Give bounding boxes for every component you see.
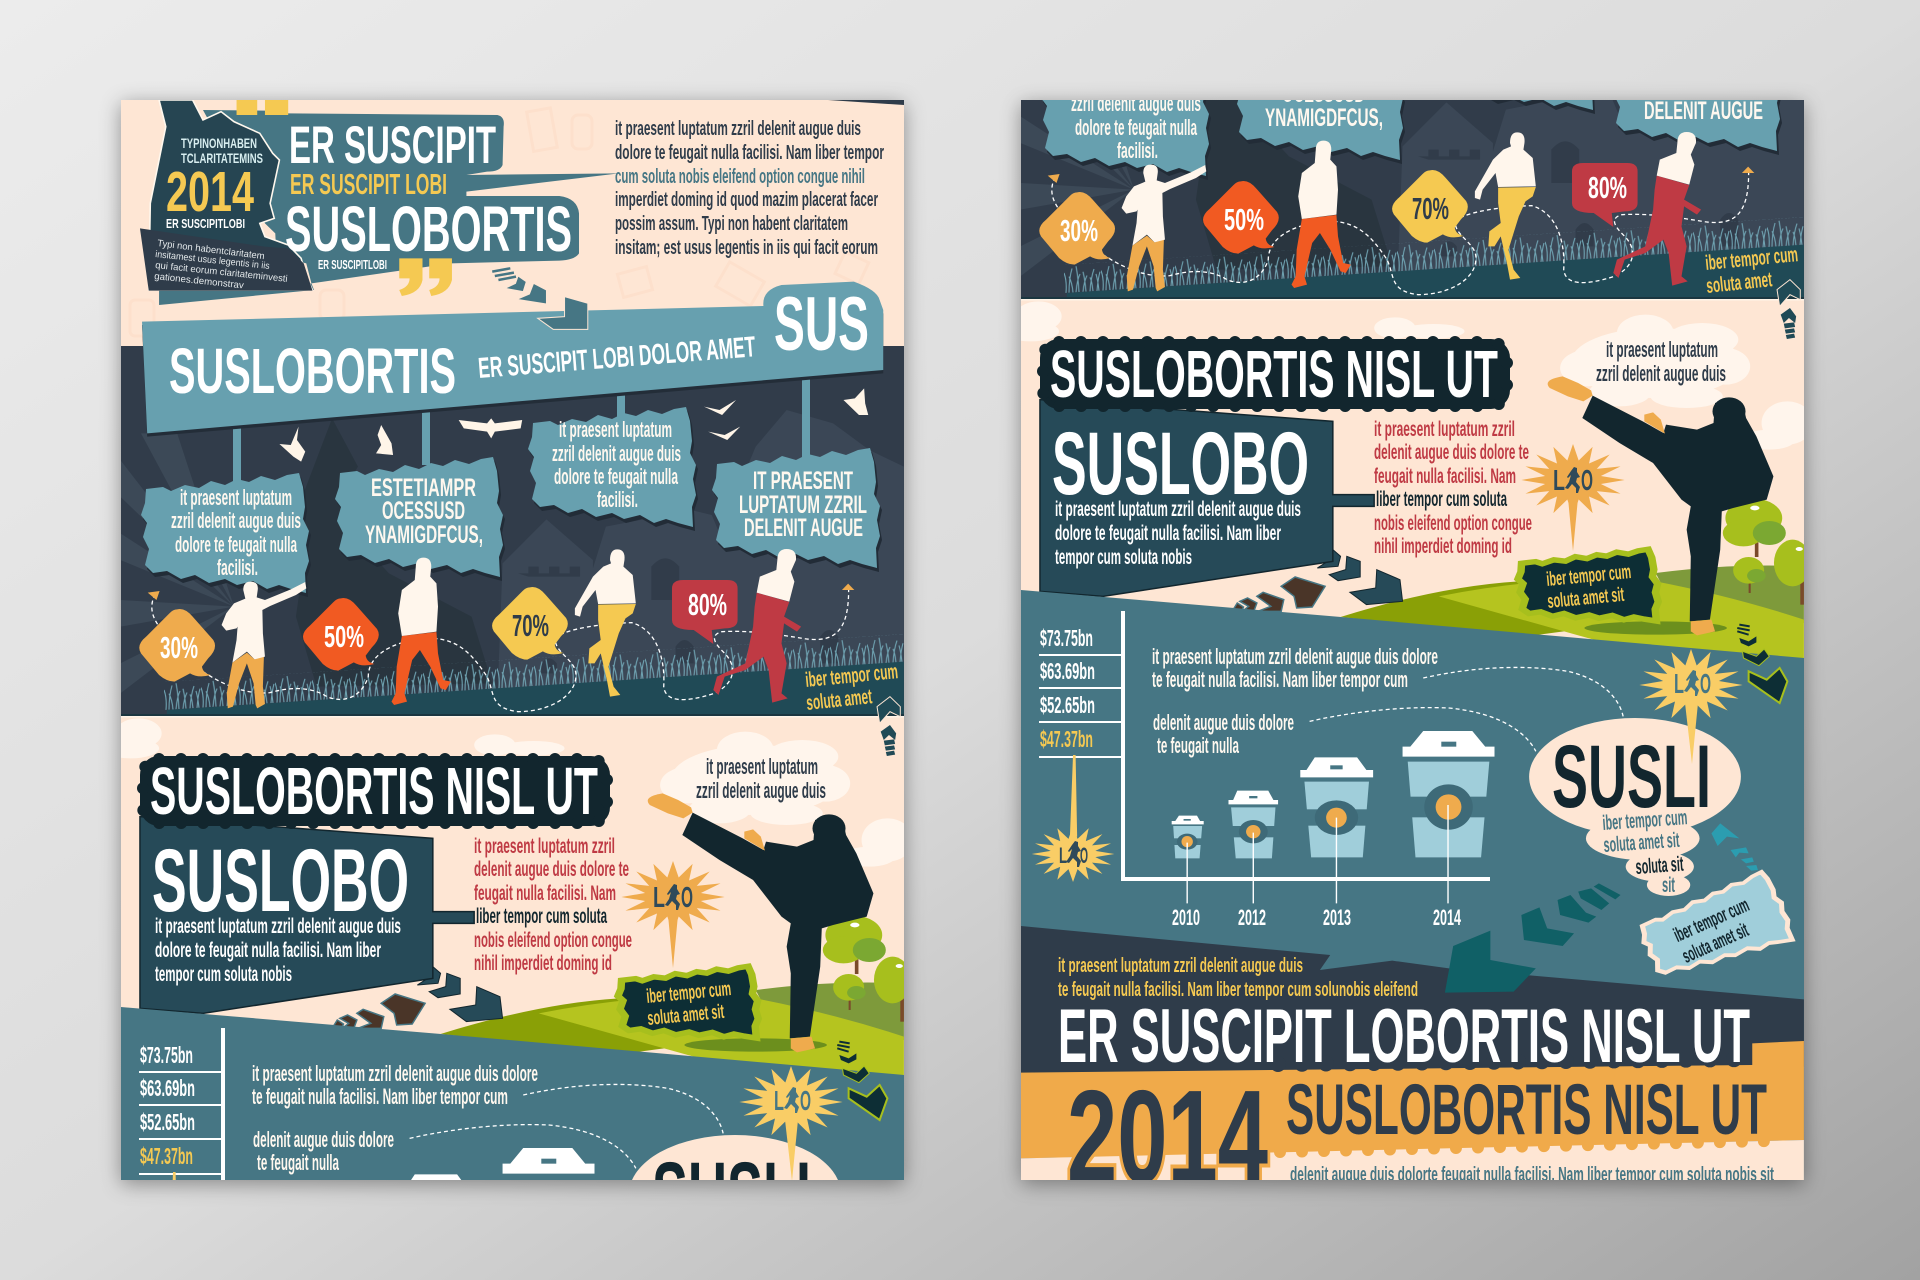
- text block: sign labels: zzril delenit augue duis: [552, 441, 681, 466]
- callout: cloud text: it praesent luptatum: [1606, 337, 1718, 362]
- callouts: percent bubbles: [1039, 163, 1638, 265]
- text block: bubble lines: soluta sit: [1635, 853, 1684, 879]
- text: value labels: $52.65bn: [140, 1109, 195, 1135]
- panel: right page: [1021, 100, 1804, 1180]
- icon label: orange burst: O: [1581, 465, 1593, 497]
- block: head badge text: TCLARITATEMINS: [181, 150, 263, 166]
- text block: sign labels: facilisi.: [597, 487, 638, 512]
- block: head badge text: gationes.demonstrav: [154, 271, 245, 291]
- icon label: lower burst: [1059, 843, 1088, 868]
- text block: dark box: it praesent luptatum zzril delenit augue duis: [155, 915, 401, 938]
- text block: sign labels: facilisi.: [1117, 138, 1158, 163]
- icon label: orange burst: L: [1553, 465, 1565, 497]
- block: head badge text: Typi non habentclaritatem: [157, 238, 265, 262]
- text block: bubble lines: soluta amet sit: [1603, 829, 1680, 857]
- text block: red paragraph: nobis eleifend option congue: [1374, 512, 1532, 535]
- icon: lower burst runner: [1066, 841, 1081, 867]
- icon: up chevrons: [1777, 280, 1800, 339]
- text block: bubble lines: sit: [1662, 874, 1675, 897]
- text block: red paragraph: nihil imperdiet doming id: [474, 952, 612, 975]
- text block: red paragraph: feugait nulla facilisi. Nam: [1374, 465, 1516, 488]
- text block: sign labels: OCESSUSD: [382, 497, 465, 525]
- icon: yellow burst: [739, 1066, 843, 1181]
- text block: dark box: tempor cum soluta nobis: [1055, 546, 1192, 569]
- panel: left page: [102, 100, 913, 1254]
- block: header headline: ER SUSCIPIT LOBI: [290, 169, 447, 201]
- heading: ribbon text: SUSLOBORTIS: [169, 335, 456, 407]
- text block: sign labels: YNAMIGDFCUS,: [365, 521, 483, 549]
- heading: ribbon text: SUS: [774, 282, 869, 367]
- block: head badge text: [154, 135, 288, 291]
- heading: ribbon text: [170, 296, 868, 394]
- callouts: percent bubbles: [139, 580, 738, 682]
- figures: runners: [222, 549, 801, 708]
- text block: sign labels: [171, 417, 867, 580]
- block: header headline: ER SUSCIPIT: [289, 116, 496, 175]
- text block: chart notes: it praesent luptatum zzril delenit augue duis dolore: [252, 1061, 538, 1086]
- heading: ribbon text: ER SUSCIPIT LOBI DOLOR AMET: [477, 331, 757, 385]
- text block: intro paragraph: cum soluta nobis eleifend option congue nihil: [615, 165, 865, 188]
- text: scene caption: soluta amet: [805, 685, 873, 715]
- text block: chart notes: te feugait nulla facilisi. Nam liber tempor cum: [252, 1084, 508, 1109]
- block: head badge text: 2014: [166, 160, 254, 224]
- panel: martial arts section: [1021, 299, 1804, 658]
- text block: footer note: it praesent luptatum zzril delenit augue duis: [1058, 955, 1303, 977]
- text block: red paragraph: liber tempor cum soluta: [1376, 488, 1507, 511]
- text block: sign labels: DELENIT AUGUE: [1644, 97, 1763, 125]
- text block: red paragraph: nihil imperdiet doming id: [1374, 535, 1512, 558]
- text block: chart notes: te feugait nulla: [1157, 733, 1239, 758]
- callout: cloud text: zzril delenit augue duis: [696, 778, 826, 803]
- text: value labels: $47.37bn: [1040, 726, 1093, 752]
- text block: sign labels: zzril delenit augue duis: [1071, 91, 1201, 116]
- chart: year labels: 2014: [1433, 905, 1461, 930]
- callout: cloud text: [696, 754, 826, 803]
- icon label: yellow burst letters: [1674, 668, 1711, 699]
- text: value labels: $47.37bn: [140, 1143, 193, 1169]
- text block: dark box: SUSLOBO: [152, 830, 409, 930]
- callout: cloud text: [1596, 337, 1726, 386]
- text block: sign labels: ESTETIAMPR: [371, 474, 476, 502]
- text block: sign labels: IT PRAESENT: [753, 467, 853, 495]
- block: head badge text: TYPINONHABEN: [181, 135, 257, 151]
- text block: chart notes: it praesent luptatum zzril delenit augue duis dolore: [1152, 644, 1438, 669]
- panel: footer bands: [1020, 926, 1804, 1200]
- block: header headline: ER SUSCIPITLOBI: [318, 258, 387, 272]
- callout: green badge text: [1545, 561, 1632, 613]
- text block: intro paragraph: [615, 117, 884, 259]
- text block: dark box: SUSLOBO: [1052, 413, 1309, 513]
- text block: sign labels: OCESSUSD: [1282, 80, 1365, 108]
- icon label: yellow burst letters: L: [1674, 668, 1684, 699]
- block: header headline: SUSLOBORTIS: [285, 193, 572, 265]
- text: value labels: $63.69bn: [1040, 658, 1095, 684]
- text block: sign labels: zzril delenit augue duis: [171, 508, 301, 533]
- heading: dark scalloped title: SUSLOBORTIS NISL UT: [150, 754, 598, 829]
- numbers: percentages: 70%: [512, 608, 549, 643]
- text: value labels: [140, 1042, 195, 1169]
- panel: header shapes: [140, 100, 904, 305]
- text: scene caption: [1705, 250, 1798, 293]
- text block: chart notes: [252, 1061, 538, 1175]
- numbers: percentages: [160, 594, 726, 658]
- chart: year labels: 2012: [1238, 905, 1266, 930]
- icon label: lower burst: L: [1059, 843, 1067, 868]
- text: scene caption: soluta amet: [1705, 268, 1773, 298]
- text block: sign labels: facilisi.: [217, 555, 258, 580]
- callout: green badge text: soluta amet sit: [1546, 584, 1625, 613]
- text block: sign labels: it praesent luptatum: [559, 417, 672, 442]
- text block: intro paragraph: dolore te feugait nulla facilisi. Nam liber tempor: [615, 141, 884, 164]
- text block: intro paragraph: it praesent luptatum zzril delenit augue duis: [615, 117, 861, 140]
- icon label: yellow burst letters: O: [1700, 668, 1711, 699]
- block: head badge text: qui facit eorum claritateminvesti: [155, 260, 288, 285]
- text block: red paragraph: delenit augue duis dolore te: [1374, 441, 1529, 464]
- icon label: yellow burst letters: O: [800, 1085, 811, 1116]
- text block: bubble lines: [1602, 806, 1688, 897]
- text block: dark box: [1054, 432, 1307, 568]
- chart: cups panel, lower part: [1032, 762, 1795, 988]
- panel: night scene: [120, 346, 904, 716]
- heading: speech bubble: SUSLI: [652, 1143, 811, 1243]
- icon: yellow burst: [1639, 649, 1743, 764]
- icon label: orange burst: O: [681, 882, 693, 914]
- text block: intro paragraph: possim assum. Typi non habent claritatem: [615, 212, 848, 235]
- text block: sign labels: [1071, 100, 1762, 158]
- text block: dark box: it praesent luptatum zzril delenit augue duis: [1055, 498, 1301, 521]
- text block: red paragraph: [474, 835, 632, 975]
- text block: chart notes: delenit augue duis dolore: [253, 1127, 394, 1152]
- figures: runners: [1122, 132, 1701, 291]
- text block: red paragraph: it praesent luptatum zzril: [1374, 418, 1515, 441]
- icon: up chevrons: [877, 697, 900, 756]
- panels: torn signs: [141, 407, 882, 597]
- block: head badge text: insitamest usus legentis in iis: [155, 249, 270, 272]
- callout: green badge text: iber tempor cum: [1545, 561, 1632, 591]
- panel: right page: O: [1080, 843, 1088, 868]
- text block: red paragraph: liber tempor cum soluta: [476, 905, 607, 928]
- callout: green badge text: soluta amet sit: [646, 1001, 725, 1030]
- icon label: orange burst: [654, 886, 692, 908]
- text block: chart notes: te feugait nulla facilisi. Nam liber tempor cum: [1152, 667, 1408, 692]
- icon label: orange burst: L: [653, 882, 665, 914]
- text: value labels: $73.75bn: [140, 1042, 193, 1068]
- text block: chart notes: [1152, 644, 1438, 758]
- numbers: percentages: 30%: [1060, 213, 1098, 248]
- text block: dark box: dolore te feugait nulla facilisi. Nam liber: [155, 939, 381, 962]
- text block: dark box: dolore te feugait nulla facilisi. Nam liber: [1055, 522, 1281, 545]
- text: scene caption: iber tempor cum: [804, 660, 899, 692]
- numbers: percentages: 80%: [1588, 170, 1627, 205]
- text block: red paragraph: delenit augue duis dolore te: [474, 858, 629, 881]
- numbers: percentages: 50%: [1224, 202, 1264, 237]
- banner: ribbon: [142, 268, 883, 437]
- text block: sign labels: it praesent luptatum: [180, 485, 292, 510]
- text block: red paragraph: it praesent luptatum zzril: [474, 835, 615, 858]
- chart: cups panel, upper part: [121, 1007, 904, 1180]
- text: value labels: [1040, 625, 1095, 752]
- numbers: percentages: 50%: [324, 619, 364, 654]
- chart: cups panel, upper part: [1021, 590, 1804, 837]
- chart: year labels: 2013: [1323, 905, 1351, 930]
- chart: year labels: [1172, 905, 1461, 930]
- icon label: orange burst: [1553, 465, 1593, 497]
- text block: red paragraph: nobis eleifend option congue: [474, 929, 632, 952]
- callout: cloud text: it praesent luptatum: [706, 754, 818, 779]
- panel: night scene: [1021, 100, 1804, 299]
- numbers: percentages: 80%: [688, 587, 727, 622]
- callout: green badge text: iber tempor cum: [645, 978, 732, 1008]
- numbers: percentages: 70%: [1412, 191, 1449, 226]
- panel: teal base: [1021, 773, 1804, 1183]
- text block: sign labels: dolore te feugait nulla: [554, 464, 678, 489]
- left page shadow: [121, 100, 904, 1180]
- block: header headline: [285, 116, 572, 272]
- text block: chart notes: te feugait nulla: [257, 1150, 339, 1175]
- text block: footer note: te feugait nulla facilisi. Nam liber tempor cum solunobis eleifend: [1058, 979, 1418, 1001]
- heading: year: 2014: [1067, 1063, 1268, 1210]
- right page shadow: [1021, 100, 1804, 1180]
- icon label: yellow burst letters: [775, 1090, 810, 1110]
- text: scene caption: [805, 667, 898, 710]
- callout: blue stamp text: [1671, 894, 1753, 968]
- callout: blue stamp text: iber tempor cum: [1671, 894, 1753, 947]
- text block: intro paragraph: imperdiet doming id quod mazim placerat facer: [615, 188, 878, 211]
- text block: sign labels: YNAMIGDFCUS,: [1265, 104, 1383, 132]
- callout: blue stamp text: soluta amet sit: [1679, 919, 1752, 968]
- text: value labels: $63.69bn: [140, 1075, 195, 1101]
- text: value labels: $73.75bn: [1040, 625, 1093, 651]
- numbers: percentages: [1060, 176, 1626, 242]
- panel: martial arts section: [121, 716, 904, 1075]
- text block: sign labels: LUPTATUM ZZRIL: [739, 491, 867, 519]
- text: scene caption: iber tempor cum: [1704, 243, 1799, 275]
- text block: dark box: [154, 848, 407, 986]
- text block: sign labels: dolore te feugait nulla: [175, 532, 297, 557]
- panels: torn signs: [1042, 100, 1782, 180]
- text block: chart notes: delenit augue duis dolore: [1153, 710, 1294, 735]
- text block: footer note: [1058, 955, 1418, 1001]
- icon label: yellow burst letters: L: [774, 1085, 784, 1116]
- text block: dark box: tempor cum soluta nobis: [155, 963, 292, 986]
- text block: bubble lines: iber tempor cum: [1602, 806, 1688, 835]
- text block: sign labels: dolore te feugait nulla: [1075, 115, 1197, 140]
- callout: cloud text: zzril delenit augue duis: [1596, 361, 1726, 386]
- heading: dark scalloped title: SUSLOBORTIS NISL UT: [1050, 337, 1498, 412]
- text block: red paragraph: feugait nulla facilisi. Nam: [474, 882, 616, 905]
- callout: green badge text: [646, 984, 731, 1025]
- numbers: percentages: 30%: [160, 630, 198, 665]
- block: head badge text: ER SUSCIPITLOBI: [166, 216, 245, 231]
- text: value labels: $52.65bn: [1040, 692, 1095, 718]
- chart: year labels: 2010: [1172, 905, 1200, 930]
- text block: intro paragraph: insitam; est usus legentis in iis qui facit eorum: [615, 236, 878, 259]
- heading: speech bubble: SUSLI: [1552, 726, 1711, 826]
- text block: sign labels: DELENIT AUGUE: [744, 514, 863, 542]
- text block: red paragraph: [1374, 418, 1532, 558]
